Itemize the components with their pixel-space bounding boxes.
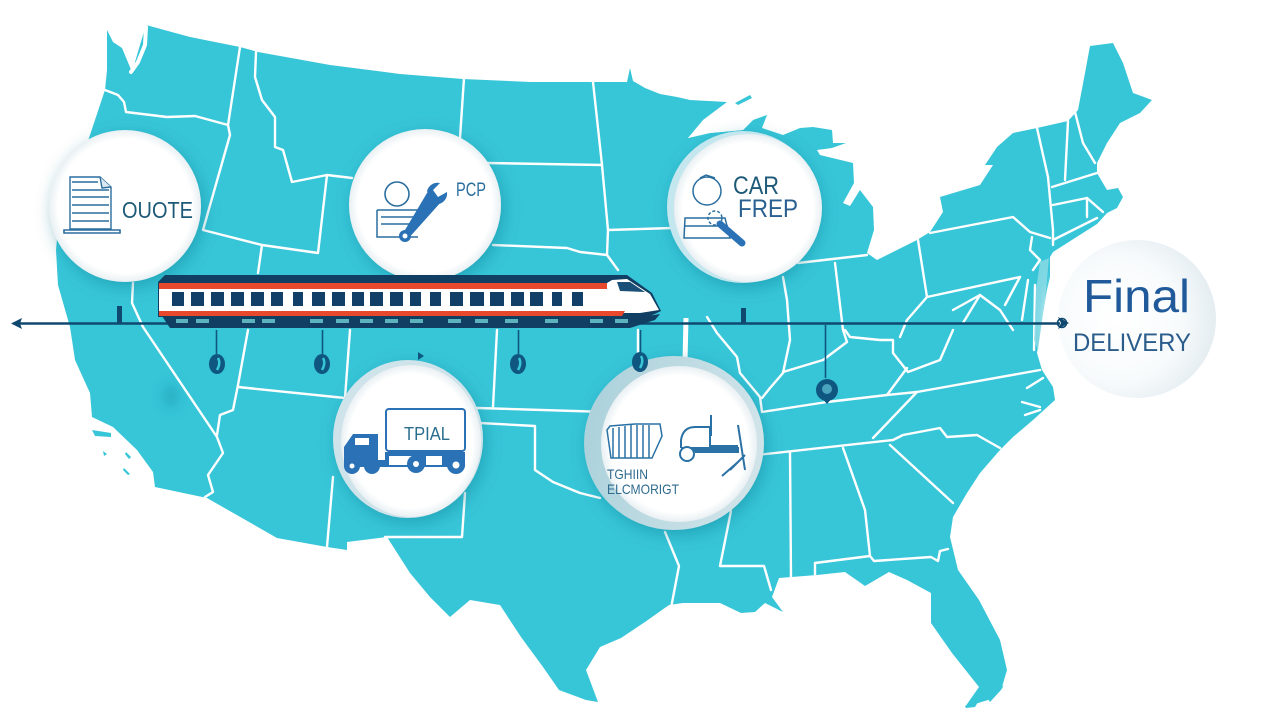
icon: rail container	[607, 424, 662, 458]
label: delivery: DELIVERY	[1073, 329, 1191, 357]
train body	[158, 275, 661, 317]
undercarriage	[162, 314, 660, 328]
icon: truck	[344, 409, 465, 474]
panel: step 3 car prep circle: FREP	[738, 195, 798, 223]
panel: final delivery circle	[1047, 233, 1219, 405]
icon: car part with magnifier	[684, 175, 742, 243]
panel: step 1 quote circle	[49, 130, 201, 282]
panel: step 2 prep circle	[349, 129, 501, 281]
icon: forklift	[680, 415, 745, 476]
panel: step 5 terminal delivery circle	[584, 356, 764, 530]
train windows	[172, 292, 583, 306]
label: final: Final	[1083, 270, 1190, 322]
route line with arrows	[11, 306, 1069, 329]
label: prep: PCP	[456, 180, 486, 201]
train	[158, 275, 661, 328]
label: terminal delivery: TGHIIN	[607, 466, 648, 482]
route pins	[209, 325, 838, 404]
soft shading on California	[164, 384, 178, 408]
label: car prep: CAR	[733, 172, 779, 200]
panel: step 4 trial truck circle	[333, 360, 483, 518]
state borders	[105, 47, 1103, 608]
icon: document on stand	[64, 177, 120, 233]
panel: step 3 car prep circle	[667, 131, 822, 283]
label: trial: TPIAL	[404, 424, 450, 444]
lake: Superior and Green Bay white shore	[688, 105, 753, 138]
icon: person with wrench	[377, 182, 447, 242]
label: quote: OUOTE	[122, 197, 193, 223]
panel: step 5 terminal delivery circle: ELCMORIGT	[607, 481, 679, 497]
